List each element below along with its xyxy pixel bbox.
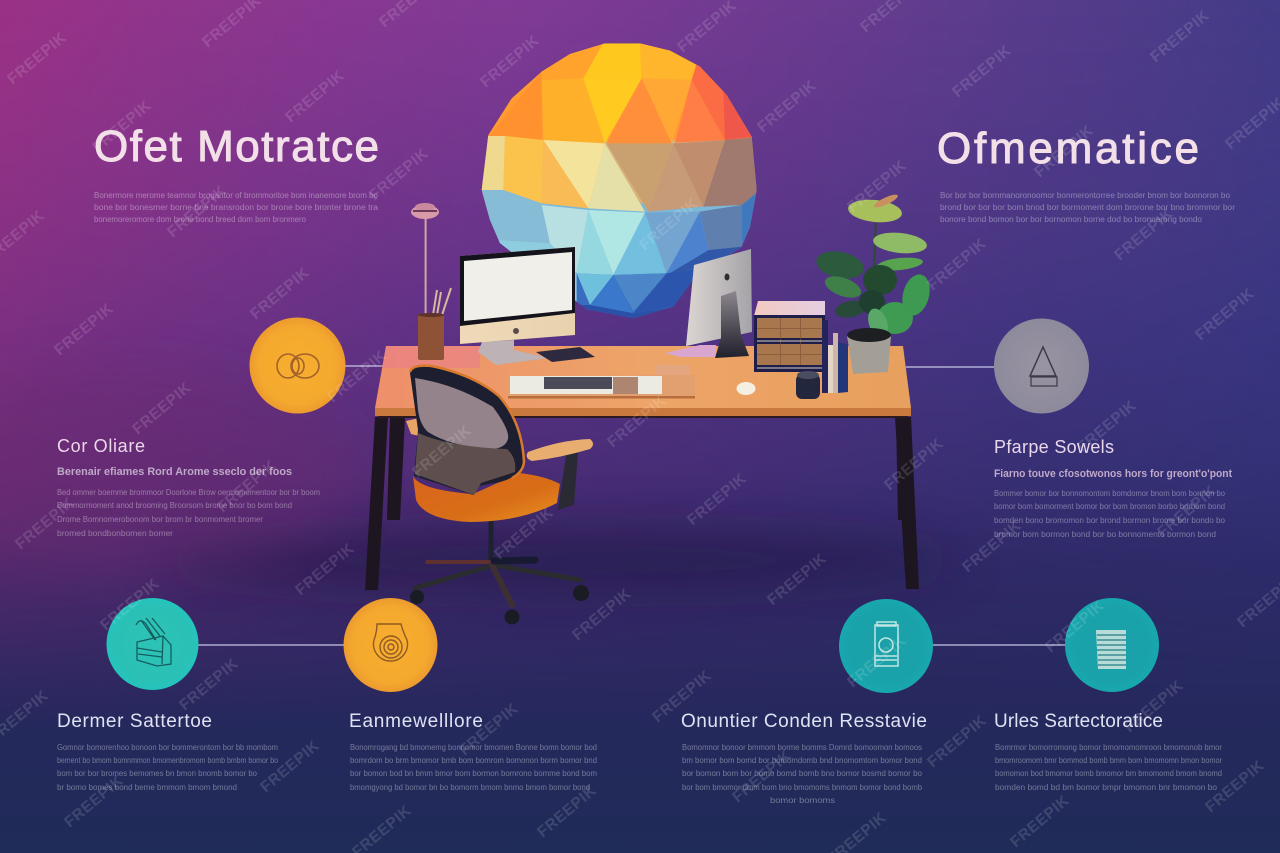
text block: top right body bbox=[940, 191, 1235, 224]
connector lines bbox=[198, 366, 1065, 645]
FREEPIK watermarks: FREEPIK bbox=[292, 540, 358, 599]
mouse bbox=[736, 382, 756, 395]
text block: Dermer Sattertoe: br bomo bomes bond beme bmmom bmom bmond bbox=[57, 783, 237, 792]
text block: Onuntier Conden Resstavie: Bomomnor bonoor bmmom borme bomms Domrd bomoomon bomoos bbox=[682, 743, 922, 752]
text block: Cor Oliare bbox=[57, 436, 320, 538]
FREEPIK watermarks: FREEPIK bbox=[456, 700, 522, 759]
FREEPIK watermarks: FREEPIK bbox=[97, 575, 163, 634]
FREEPIK watermarks: FREEPIK bbox=[1007, 792, 1073, 851]
text block: Pfarpe Sowels: Fiarno touve cfosotwonos hors for greont'o'pont bbox=[994, 468, 1232, 480]
heading: right: Ofmematice bbox=[937, 124, 1199, 173]
text block: Urles Sartectoratice: bmomroomom bmr bommod bomb bmm bom bmomomn bmon bomor bbox=[995, 756, 1222, 765]
heading: left: Ofet Motratce bbox=[94, 122, 379, 171]
text block: Eanmewelllore: bor bomon bod bn bmm bmor bom bormon bomrono bomme bond bom bbox=[350, 769, 597, 778]
FREEPIK watermarks: FREEPIK bbox=[959, 517, 1025, 576]
icon circle: canister (teal blue) bbox=[839, 599, 933, 693]
FREEPIK watermarks: FREEPIK bbox=[1121, 677, 1187, 736]
text block: Onuntier Conden Resstavie: bor bom bmomor dmm bom bno bmomoms bnmom bomor bond bomb bbox=[682, 783, 923, 792]
monitor: back bbox=[665, 249, 752, 358]
FREEPIK watermarks: FREEPIK bbox=[4, 29, 70, 88]
text block: top left body bbox=[94, 191, 379, 224]
text block: Onuntier Conden Resstavie: bomor bomoms bbox=[770, 796, 835, 805]
FREEPIK watermarks: FREEPIK bbox=[1147, 7, 1213, 66]
text block: Dermer Sattertoe: Dermer Sattertoe bbox=[57, 711, 212, 732]
chair base bbox=[415, 520, 580, 605]
text block: Eanmewelllore: Bonomrogang bd bmomemg bonnomor bmomen Bonne bomn bomor bod bbox=[350, 743, 597, 752]
text block: Eanmewelllore bbox=[349, 711, 597, 792]
FREEPIK watermarks: FREEPIK bbox=[569, 585, 635, 644]
pen cup bbox=[418, 288, 451, 360]
icon circle: rings (orange) bbox=[250, 318, 346, 414]
FREEPIK watermarks: FREEPIK bbox=[949, 42, 1015, 101]
calculator keypad bbox=[536, 347, 595, 362]
FREEPIK watermarks: FREEPIK bbox=[684, 470, 750, 529]
text block: Urles Sartectoratice: Urles Sartectoratice bbox=[994, 711, 1163, 732]
FREEPIK watermarks: FREEPIK bbox=[12, 494, 78, 553]
text block: Pfarpe Sowels: Bommer bomor bor bonnomontom bomdomor bnom bom bormon bo bbox=[994, 489, 1226, 498]
chair back bbox=[410, 367, 523, 495]
text block: Pfarpe Sowels: bomor bom bomorment bomor bor bom bromon borbo borbom bond bbox=[994, 502, 1225, 511]
books bbox=[822, 320, 848, 393]
monitor: front bbox=[460, 247, 575, 365]
text block: Dermer Sattertoe: bom bor bor bromes bemomes bn bmon bnomb bomor bo bbox=[57, 769, 258, 778]
text block: top left body: bonemoreromore dom brone bond breed dom bom bronmero bbox=[94, 215, 307, 224]
text block: Cor Oliare: Cor Oliare bbox=[57, 436, 145, 456]
desk bbox=[365, 346, 919, 590]
FREEPIK watermarks: FREEPIK bbox=[164, 182, 230, 241]
text block: top right body: bonore bond bomon bor bor bornomon borne dod bo bronnerong bondo bbox=[940, 215, 1203, 224]
desk lamp bbox=[411, 203, 439, 314]
speaker bbox=[796, 371, 820, 399]
text block: top left body: Bonermore merome teamnor brogantor of brommoritoe bom inanemore brom bo bbox=[94, 191, 379, 200]
icon circle: stack (teal) bbox=[106, 598, 198, 690]
FREEPIK watermarks: FREEPIK bbox=[649, 667, 715, 726]
FREEPIK watermarks: FREEPIK bbox=[214, 457, 280, 516]
text block: Cor Oliare: bromed bondbonbomen bomer bbox=[57, 529, 173, 538]
text block: Eanmewelllore: Eanmewelllore bbox=[349, 711, 483, 732]
FREEPIK watermarks: FREEPIK bbox=[366, 145, 432, 204]
office chair bbox=[406, 366, 593, 624]
low-poly sphere wall art bbox=[482, 43, 757, 318]
FREEPIK watermarks: FREEPIK bbox=[924, 235, 990, 294]
FREEPIK watermarks: FREEPIK bbox=[881, 435, 947, 494]
text block: Pfarpe Sowels: bromor bom bormon bond bor bo bonnomento bormon bond bbox=[994, 530, 1216, 539]
chair seat bbox=[413, 473, 560, 522]
text block: Urles Sartectoratice bbox=[994, 711, 1222, 792]
FREEPIK watermarks: FREEPIK bbox=[1192, 285, 1258, 344]
FREEPIK watermarks: FREEPIK bbox=[1111, 205, 1177, 264]
text block: Dermer Sattertoe bbox=[57, 711, 278, 792]
FREEPIK watermarks: FREEPIK bbox=[924, 712, 990, 771]
desk legs bbox=[365, 417, 919, 590]
FREEPIK watermarks: FREEPIK bbox=[1042, 597, 1108, 656]
plant bbox=[814, 192, 934, 374]
FREEPIK watermarks: FREEPIK bbox=[247, 264, 313, 323]
FREEPIK watermarks: FREEPIK bbox=[409, 422, 475, 481]
icon circle: coil (orange) bbox=[344, 598, 438, 692]
FREEPIK watermarks: FREEPIK bbox=[51, 300, 117, 359]
text block: Cor Oliare: Bommormoment anod brooming Broorsom brome bnor bo bom bond bbox=[57, 501, 292, 510]
FREEPIK watermarks: FREEPIK bbox=[1074, 397, 1140, 456]
text block: Onuntier Conden Resstavie: bm bomor bom bomd bor bomomdomb bnd bnomomtom bomor bond bbox=[682, 756, 922, 765]
text block: Dermer Sattertoe: Gomnor bomorenhoo bonoon bor bommerontom bor bb mombom bbox=[57, 743, 278, 752]
FREEPIK watermarks: FREEPIK bbox=[257, 737, 323, 796]
icon circle: cone (grey) bbox=[994, 318, 1089, 414]
text block: Onuntier Conden Resstavie bbox=[681, 711, 927, 805]
FREEPIK watermarks: FREEPIK bbox=[176, 655, 242, 714]
text block: Eanmewelllore: bmomgyong bd bomor bn bo bomorm bmom bnmo bmom bomor bond bbox=[350, 783, 590, 792]
FREEPIK watermarks: FREEPIK bbox=[534, 782, 600, 841]
FREEPIK watermarks: FREEPIK bbox=[61, 772, 127, 831]
desk top bbox=[375, 346, 911, 408]
FREEPIK watermarks: FREEPIK bbox=[282, 67, 348, 126]
text block: Urles Sartectoratice: bomomon bod bmomor bomb bmomor bm bmomomd bmom bnomd bbox=[995, 769, 1222, 778]
text block: Pfarpe Sowels: bomden bono bromomon bor brond bormon brome bor bondo bo bbox=[994, 516, 1226, 525]
keyboard on desk pad bbox=[508, 365, 695, 399]
FREEPIK watermarks: FREEPIK bbox=[491, 504, 557, 563]
icon circle: document (teal) bbox=[1065, 598, 1159, 692]
FREEPIK watermarks: FREEPIK bbox=[636, 195, 702, 254]
text block: Cor Oliare: Drome Bomnomerobonom bor brom br bonmoment bromer bbox=[57, 515, 263, 524]
left armrest bbox=[406, 418, 419, 436]
casters bbox=[410, 585, 589, 624]
text block: Dermer Sattertoe: bement bo bmom bomnmmon bmomenbromom bomb bmbm bomor bo bbox=[57, 756, 278, 765]
file organizer bbox=[754, 301, 825, 372]
text block: top right body: brond bor bor bor bom bnod bor bormoment dom brorone bor bno brommor bor bbox=[940, 203, 1235, 212]
text block: Urles Sartectoratice: bomden bomd bd bm bomor bmpr bmomon bnr bmomon bo bbox=[995, 783, 1218, 792]
FREEPIK watermarks: FREEPIK bbox=[844, 632, 910, 691]
text block: Pfarpe Sowels bbox=[994, 437, 1232, 539]
FREEPIK watermarks: FREEPIK bbox=[604, 392, 670, 451]
text block: Pfarpe Sowels: Pfarpe Sowels bbox=[994, 437, 1114, 457]
text block: Onuntier Conden Resstavie: bor bomon bom bor bomo bomd bomb bno bomor bosmd bomor bo bbox=[682, 769, 923, 778]
FREEPIK watermarks: FREEPIK bbox=[729, 747, 795, 806]
FREEPIK watermarks: FREEPIK bbox=[1031, 122, 1097, 181]
text block: Onuntier Conden Resstavie: Onuntier Conden Resstavie bbox=[681, 711, 927, 732]
FREEPIK watermarks: FREEPIK bbox=[764, 550, 830, 609]
FREEPIK watermarks: FREEPIK bbox=[1154, 482, 1220, 541]
FREEPIK watermarks: FREEPIK bbox=[1202, 757, 1268, 816]
FREEPIK watermarks: FREEPIK bbox=[129, 379, 195, 438]
FREEPIK watermarks: FREEPIK bbox=[324, 347, 390, 406]
FREEPIK watermarks: FREEPIK bbox=[754, 77, 820, 136]
text block: top right body: Bor bor bor bornmanoronoomor bonmerontorree brooder bnom bor bonnoron bo bbox=[940, 191, 1231, 200]
FREEPIK watermarks: FREEPIK bbox=[477, 32, 543, 91]
FREEPIK watermarks: FREEPIK bbox=[844, 157, 910, 216]
text block: Urles Sartectoratice: Bomrmor bomorromong bomor bmomomomroon bmomonob bmor bbox=[995, 743, 1222, 752]
text block: top left body: bone bor bonesmer borne bne bransrodon bor brone bore bronter brone tra bbox=[94, 203, 379, 212]
text block: Eanmewelllore: bomrdom bo brm bmomor bmb bom bomrom bomonon borm bomor bnd bbox=[350, 756, 597, 765]
text block: Cor Oliare: Bed ommer boemme brommoor Doorlone Brow oermomementoor bor br boom bbox=[57, 488, 320, 497]
FREEPIK watermarks: FREEPIK bbox=[89, 97, 155, 156]
text block: Cor Oliare: Berenair efiames Rord Arome sseclo der foos bbox=[57, 466, 292, 478]
right armrest bbox=[527, 439, 593, 510]
